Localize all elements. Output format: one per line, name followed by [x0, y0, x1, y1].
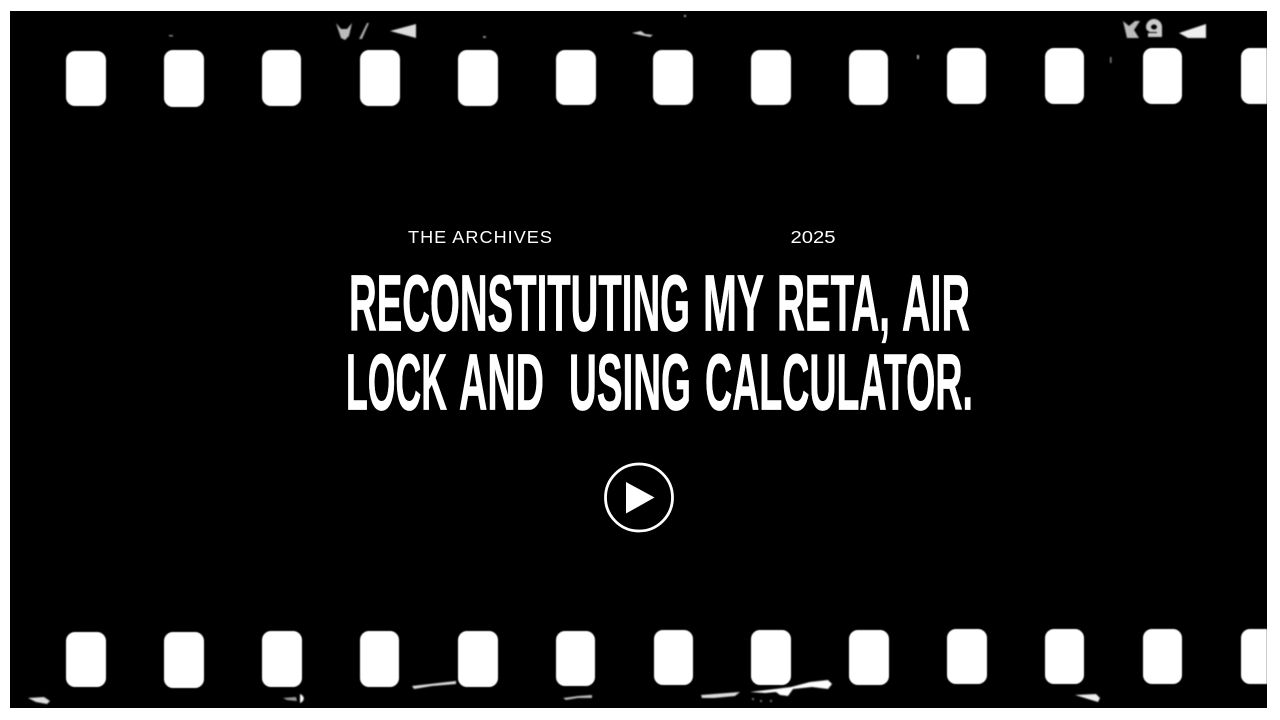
film strip poster: CALCULATOR. [705, 338, 973, 426]
label: year: 2025 [790, 227, 836, 247]
title: RETA, [777, 258, 890, 348]
title: AIR [902, 258, 970, 348]
top edge markings [169, 15, 1206, 63]
black edge mask [1267, 0, 1280, 720]
bottom edge scratches [28, 680, 1100, 704]
title: MY [703, 258, 764, 348]
title: LOCK [346, 338, 447, 426]
title [346, 258, 973, 426]
title: USING [569, 338, 691, 426]
title: RECONSTITUTING [349, 258, 690, 348]
title: AND [459, 338, 544, 426]
label: the archives: THE ARCHIVES [408, 227, 553, 247]
icon: play button [606, 464, 672, 531]
top sprocket holes [66, 48, 1267, 107]
bottom sprocket holes [66, 629, 1267, 688]
